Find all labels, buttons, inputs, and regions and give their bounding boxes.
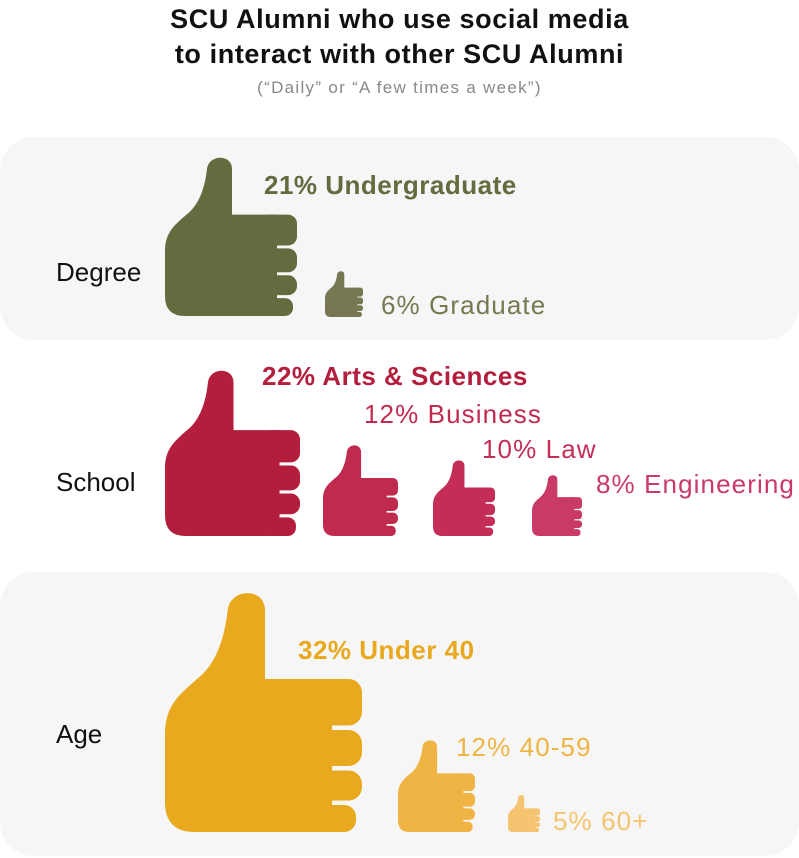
label: school: School (56, 467, 136, 497)
text: graduate: 6% Graduate (381, 290, 546, 320)
text: engineering: 8% Engineering (596, 469, 795, 499)
text: 40-59: 12% 40-59 (456, 732, 592, 762)
panel: age (0, 572, 799, 856)
icon: graduate thumb (325, 271, 363, 317)
icon: 60+ thumb (508, 795, 540, 832)
panel: degree (0, 137, 799, 340)
text: business: 12% Business (364, 399, 542, 429)
icon: arts thumb (165, 370, 300, 536)
text: arts: 22% Arts & Sciences (262, 361, 528, 391)
title (170, 4, 629, 69)
title: SCU Alumni who use social media (170, 4, 629, 34)
text: 60+: 5% 60+ (553, 806, 649, 836)
icon: undergrad thumb (165, 158, 297, 316)
icon: under 40 thumb (165, 593, 362, 832)
icon: 40-59 thumb (398, 740, 475, 832)
icon: engineering thumb (532, 475, 582, 536)
icon: law thumb (433, 460, 495, 536)
title: to interact with other SCU Alumni (175, 39, 624, 69)
text: law: 10% Law (482, 434, 597, 464)
text: under 40: 32% Under 40 (298, 635, 475, 665)
label: degree: Degree (56, 257, 141, 287)
icon: business thumb (323, 445, 398, 536)
label: age: Age (56, 719, 102, 749)
text: undergrad: 21% Undergraduate (264, 170, 517, 200)
subtitle: (“Daily” or “A few times a week”) (257, 78, 542, 97)
